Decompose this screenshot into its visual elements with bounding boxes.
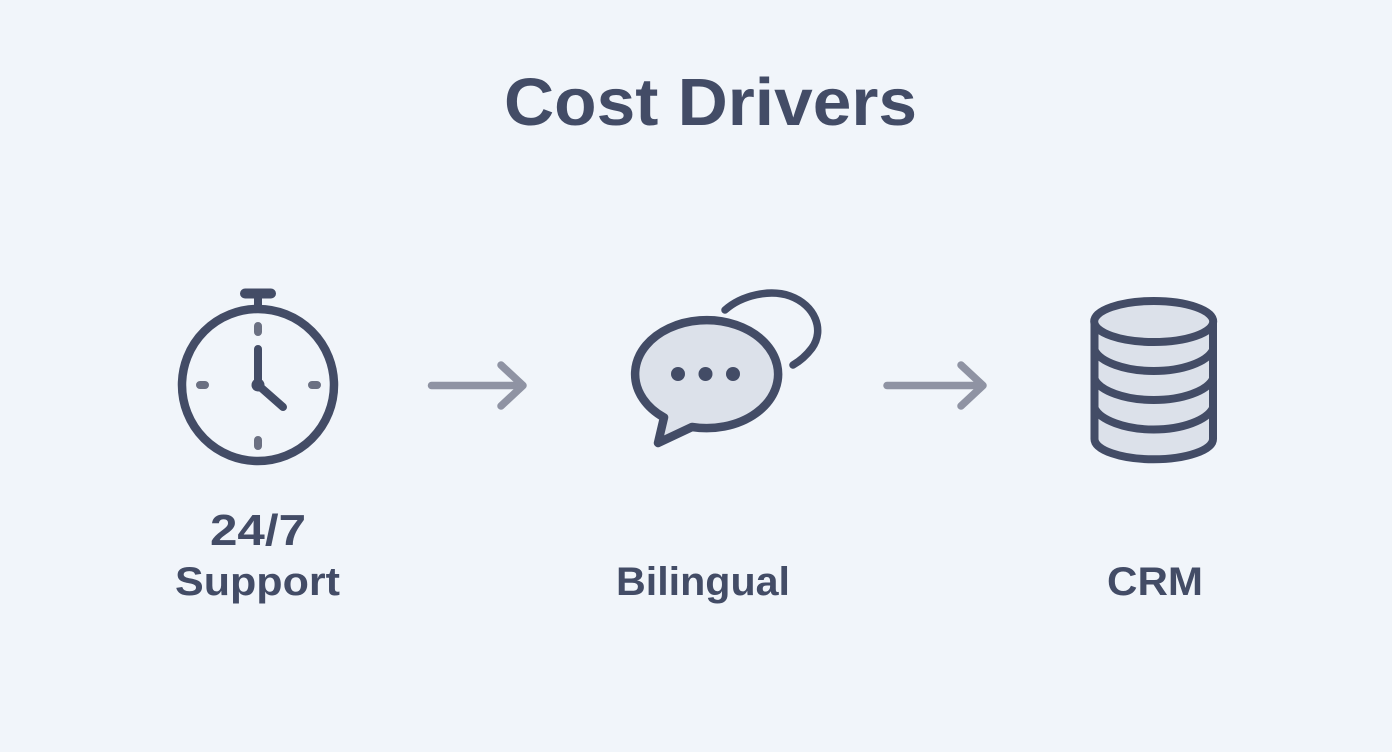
icon: database xyxy=(1094,301,1213,459)
label: 24/7 Support: Support xyxy=(175,560,340,604)
arrow: support to bilingual xyxy=(432,365,523,406)
label: 24/7 Support: 24/7 xyxy=(210,506,306,555)
arrow: bilingual to CRM xyxy=(887,365,983,406)
label: Bilingual: Bilingual xyxy=(616,560,790,604)
label: CRM: CRM xyxy=(1107,560,1203,604)
icon: speech bubbles xyxy=(635,293,818,443)
label: 24/7 Support xyxy=(175,506,340,604)
icon: stopwatch clock xyxy=(182,294,334,461)
title: Cost Drivers xyxy=(504,65,917,140)
